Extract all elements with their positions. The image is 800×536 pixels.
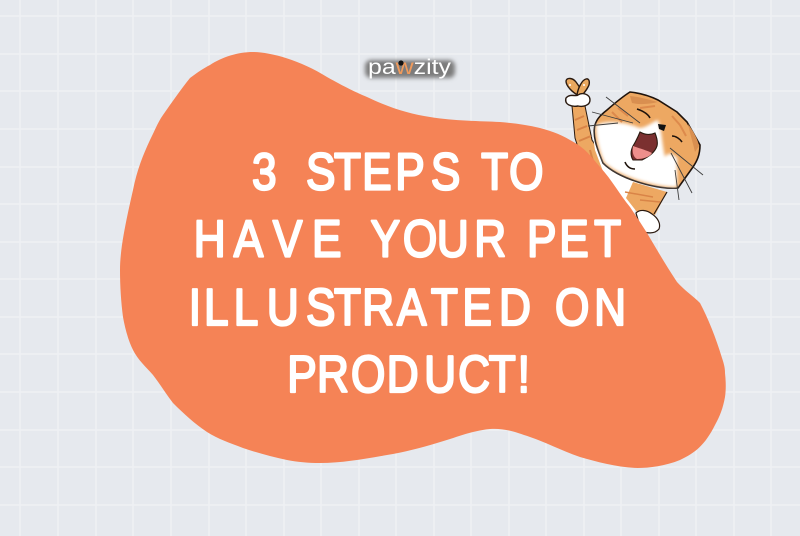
title line 3: ILLUSTRATED ON — [189, 279, 626, 337]
cat arm — [572, 106, 612, 185]
cat nose — [658, 124, 666, 131]
title line 2: HAVE YOUR PET — [194, 210, 621, 268]
cat paw — [636, 210, 660, 233]
title — [189, 143, 626, 404]
illustration: cat waving — [566, 78, 703, 233]
cat white face — [596, 120, 677, 187]
title line 4: PRODUCT! — [287, 346, 530, 404]
logo shadow — [365, 60, 455, 78]
cat mouth — [631, 132, 657, 160]
title line 1: 3 STEPS TO — [252, 143, 544, 201]
cat ear — [630, 96, 658, 104]
orange blob — [120, 52, 726, 468]
cat arm stripes — [575, 116, 594, 165]
cat stripes — [612, 106, 686, 136]
cat head — [594, 92, 700, 188]
cat whiskers — [588, 97, 703, 200]
logo wordmark: pawzity — [368, 56, 452, 79]
logo nose — [398, 60, 404, 66]
cat chest fur — [626, 182, 667, 215]
cat fingers — [566, 78, 590, 106]
logo: pawzity — [365, 56, 455, 79]
cat tongue — [633, 146, 652, 159]
cat body — [592, 130, 640, 215]
cat eyes — [625, 109, 682, 169]
